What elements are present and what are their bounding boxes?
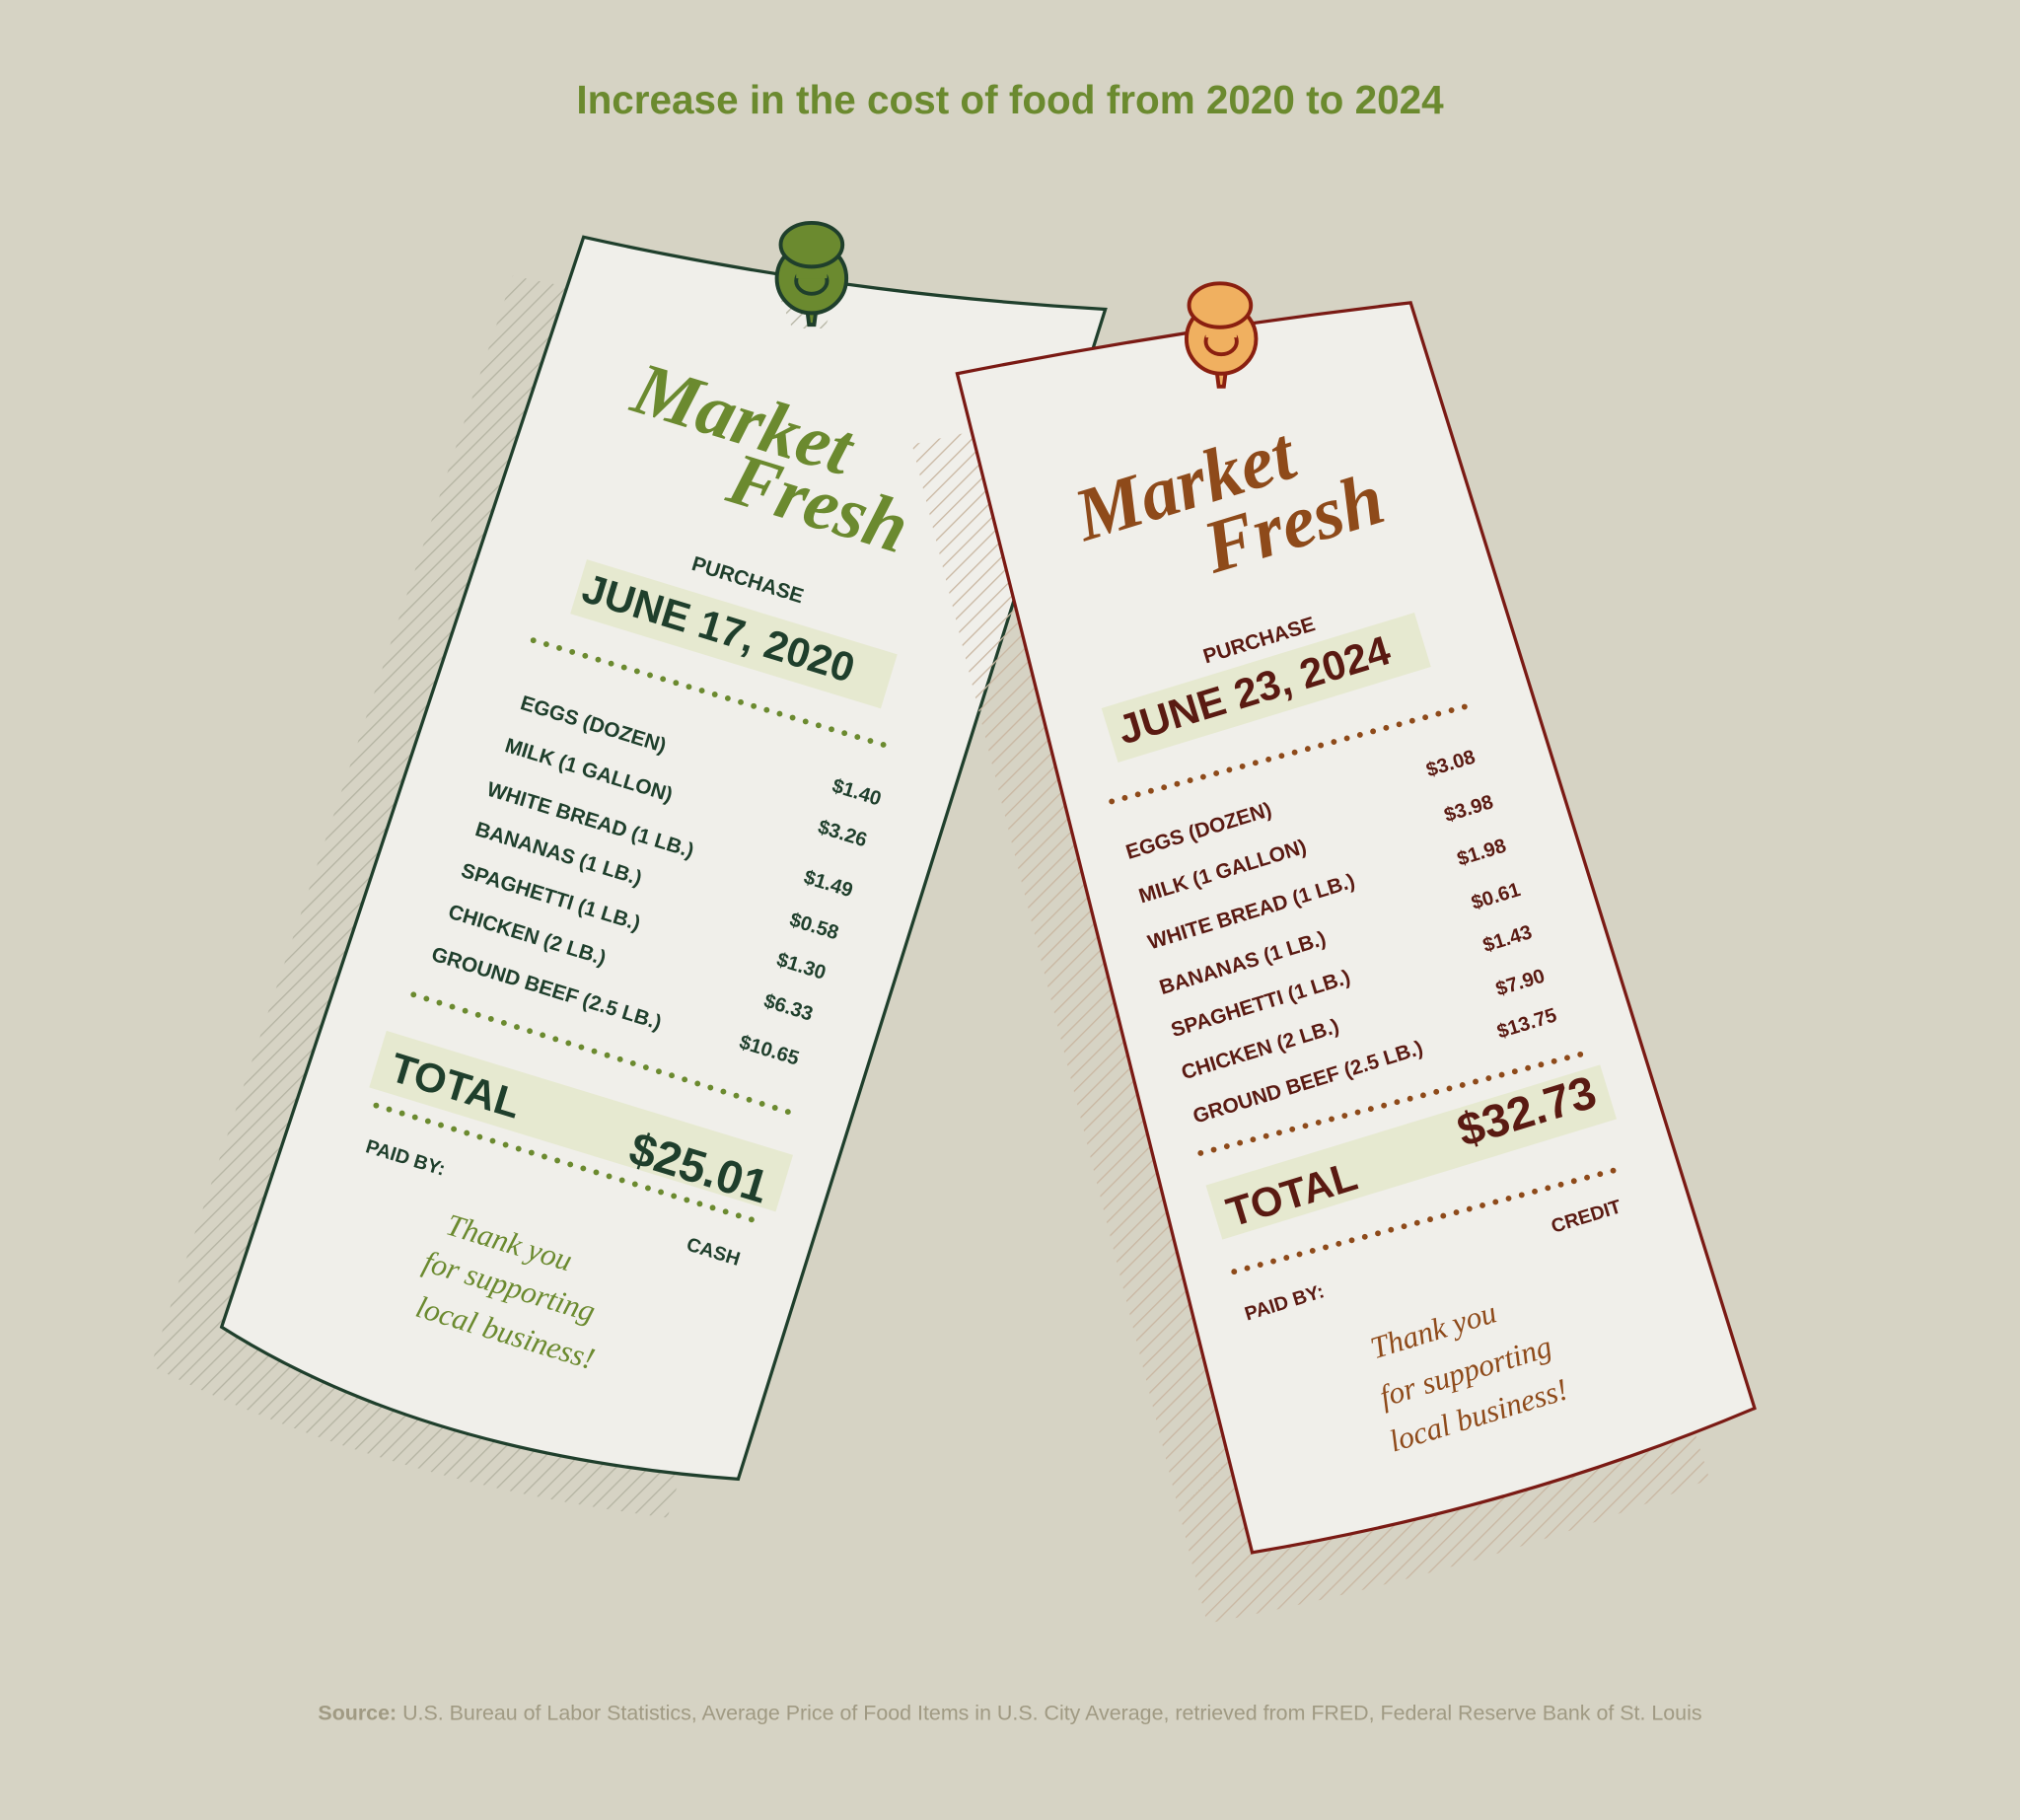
prices 2020: $1.40: [830, 775, 884, 811]
total box 2024: [1204, 1061, 1617, 1240]
items list 2020: BANANAS (1 LB.): [472, 818, 644, 890]
prices 2024: $3.08: [1424, 747, 1478, 781]
thank you note 2020: [412, 1207, 600, 1376]
thank you note 2020: Thank you: [442, 1207, 576, 1277]
prices 2024: $1.98: [1455, 836, 1509, 870]
total box 2020: $25.01: [623, 1122, 774, 1213]
purchase label: PURCHASE: [1200, 613, 1318, 668]
logo: Market Fresh green: Market: [622, 346, 864, 492]
prices 2020: $3.26: [816, 816, 869, 851]
items list 2024: BANANAS (1 LB.): [1157, 927, 1329, 999]
prices 2020: $1.30: [774, 949, 829, 984]
icon: orange pushpin: [1187, 283, 1256, 387]
paid by 2020: PAID BY:: [363, 1135, 448, 1181]
items list 2020: [429, 692, 696, 1035]
title: Increase in the cost of food from 2020 to 2024: [576, 77, 1444, 122]
purchase label: PURCHASE: [689, 552, 806, 608]
items list 2020: CHICKEN (2 LB.): [446, 901, 609, 970]
source note: Source: U.S. Bureau of Labor Statistics, Average Price of Food Items in U.S. City Average, retrieved from FRED, Federal Reserve Bank of St. Louis: [318, 1702, 1702, 1725]
shadow: right receipt: [912, 374, 1709, 1624]
prices 2020: $10.65: [737, 1032, 802, 1070]
receipt: 2024: [957, 303, 1755, 1553]
shadow: left receipt: [151, 276, 1035, 1518]
items list 2020: MILK (1 GALLON): [502, 734, 676, 807]
thank you note 2020: local business!: [412, 1289, 599, 1376]
items list 2024: WHITE BREAD (1 LB.): [1145, 870, 1357, 954]
total box 2024: TOTAL: [1221, 1152, 1362, 1236]
items list 2020: GROUND BEEF (2.5 LB.): [429, 943, 664, 1035]
paid by 2024: CREDIT: [1549, 1196, 1623, 1238]
thank you note 2024: local business!: [1385, 1371, 1572, 1459]
prices 2024: $1.43: [1480, 921, 1535, 957]
logo: Market Fresh green: Fresh: [718, 436, 918, 569]
logo: Market Fresh brown: Fresh: [1193, 457, 1393, 590]
prices 2020: $6.33: [761, 990, 816, 1026]
prices 2024: $13.75: [1494, 1004, 1559, 1043]
items list 2020: WHITE BREAD (1 LB.): [484, 778, 696, 862]
logo: Market Fresh brown: Market: [1064, 411, 1306, 557]
thank you note 2024: [1366, 1294, 1572, 1459]
logo: Market Fresh green: [622, 346, 918, 569]
receipt: 2024: PAID BY:: [1242, 1280, 1327, 1326]
items list 2020: SPAGHETTI (1 LB.): [459, 859, 643, 935]
prices 2020: $1.49: [801, 866, 855, 902]
prices 2024: $3.98: [1442, 791, 1496, 827]
logo: Market Fresh brown: [1064, 411, 1393, 590]
pin shadow: [779, 296, 837, 328]
receipt: 2020: CASH: [684, 1234, 743, 1271]
prices 2024: [1424, 747, 1559, 1043]
icon: green pushpin: [777, 223, 846, 325]
prices 2024: $7.90: [1493, 966, 1548, 1000]
total box 2024: $32.73: [1451, 1065, 1602, 1156]
thank you note 2020: for supporting: [419, 1244, 600, 1329]
total box 2020: TOTAL: [385, 1044, 527, 1128]
thank you note 2024: Thank you: [1366, 1294, 1500, 1365]
items list 2024: [1123, 798, 1425, 1128]
total box 2020: [368, 1031, 793, 1217]
thank you note 2024: for supporting: [1376, 1329, 1555, 1414]
items list 2024: CHICKEN (2 LB.): [1179, 1015, 1341, 1084]
items list 2024: SPAGHETTI (1 LB.): [1169, 966, 1353, 1042]
items list 2024: EGGS (DOZEN): [1123, 798, 1274, 864]
prices 2020: $0.58: [787, 910, 841, 944]
prices 2024: $0.61: [1469, 879, 1523, 914]
items list 2020: EGGS (DOZEN): [518, 692, 669, 758]
items list 2024: GROUND BEEF (2.5 LB.): [1190, 1037, 1425, 1128]
date box: JUNE 17, 2020: [577, 564, 860, 692]
prices 2020: [737, 775, 884, 1070]
date box: JUNE 23, 2024: [1113, 626, 1397, 754]
items list 2024: MILK (1 GALLON): [1136, 836, 1309, 908]
receipt: 2020: [222, 237, 1106, 1479]
